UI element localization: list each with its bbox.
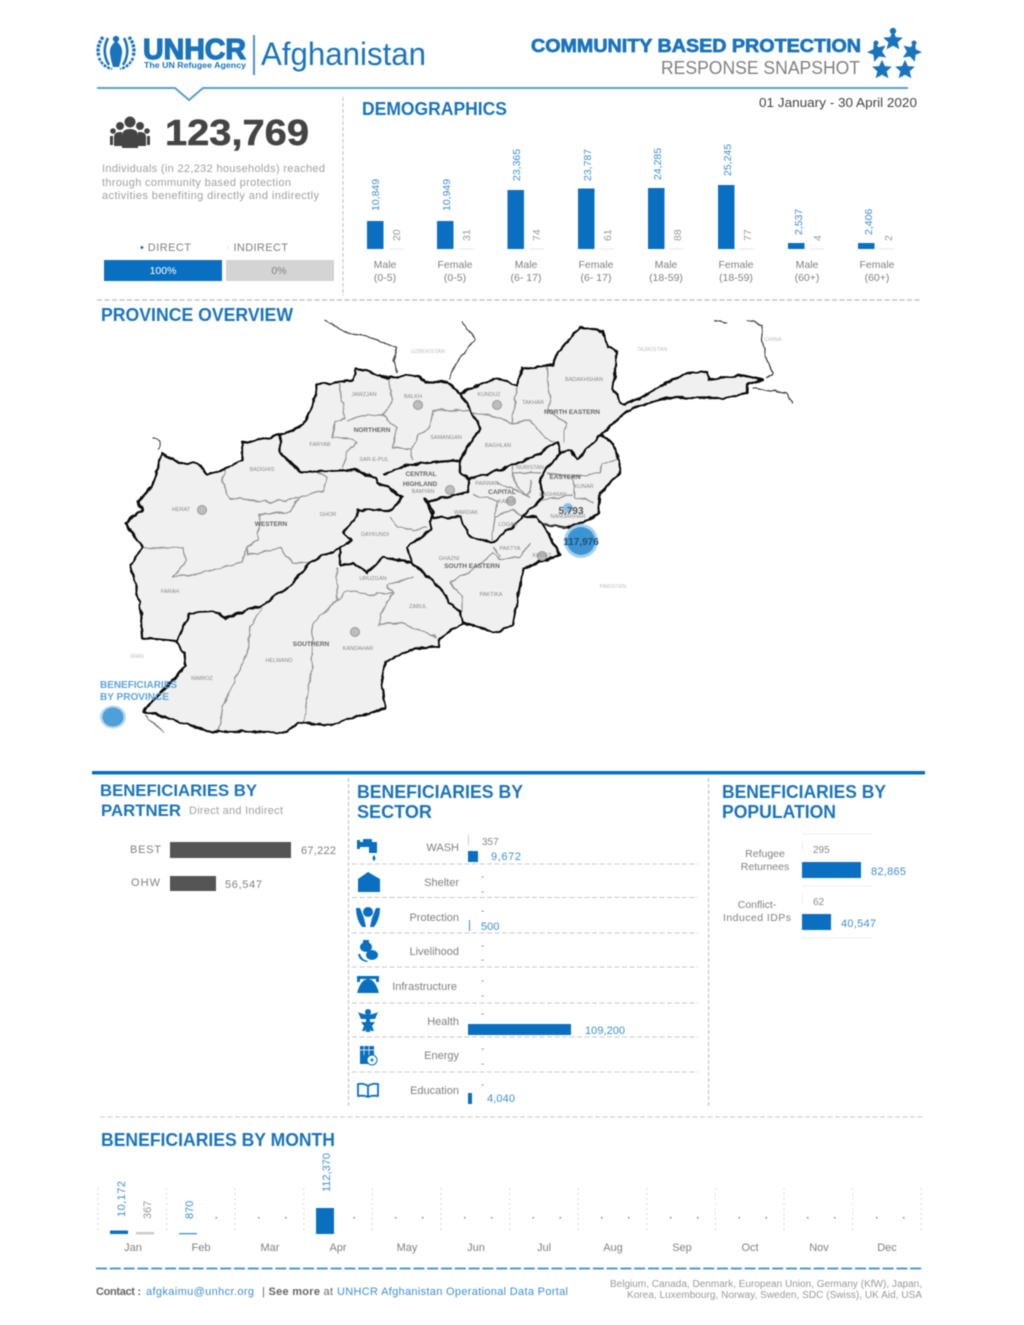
column chart: Aug [603, 1242, 623, 1254]
province labels: TAKHAR [522, 400, 544, 406]
panel: beneficiaries by partner [100, 781, 336, 891]
column chart: Jan [124, 1242, 142, 1254]
country fill [125, 327, 763, 732]
region labels: HIGHLAND [403, 481, 437, 488]
icon: road [357, 976, 379, 993]
total number: 123,769 [165, 112, 309, 153]
bar chart: 23,787 [582, 149, 594, 181]
footer: donors: Korea, Luxembourg, Norway, Sweden, SDC (Swiss), UK Aid, USA [627, 1290, 922, 1301]
province labels: BADGHIS [250, 467, 275, 473]
row: refugee returnees: 295 [813, 845, 830, 856]
column chart: Mar [261, 1242, 280, 1254]
bar chart: Female [578, 259, 614, 271]
panel: demographics [362, 98, 895, 284]
country labels: CHINA [764, 337, 782, 343]
map of Afghanistan [125, 320, 792, 733]
province labels: KUNDUZ [478, 392, 501, 398]
regional boundaries [125, 327, 763, 732]
logo tagline: The UN Refugee Agency [144, 60, 246, 70]
icon: protecting hands [356, 907, 380, 927]
province labels: FARYAB [309, 442, 331, 448]
icon: tap [357, 839, 377, 861]
row: conflict-induced IDPs: 40,547 [841, 918, 876, 930]
bar chart: 2,537 [793, 209, 805, 235]
region labels: WESTERN [255, 521, 288, 528]
province labels: PAKTYA [500, 546, 521, 552]
row: Energy: Energy [424, 1050, 459, 1062]
panel: beneficiaries by month [98, 1129, 921, 1254]
bar chart: 74 [531, 229, 543, 241]
region labels: NORTHERN [354, 427, 391, 434]
province labels [161, 377, 603, 682]
bar chart: Male [515, 259, 538, 271]
panel: beneficiaries by population [722, 781, 906, 938]
bar chart: (0-5) [374, 272, 396, 284]
report title [531, 35, 861, 78]
row: Livelihood [358, 940, 484, 966]
row: Education: - [481, 1080, 484, 1091]
row: Education: 4,040 [487, 1093, 515, 1105]
row: refugee returnees [741, 842, 906, 878]
footer: contact: afgkaimu@unhcr.org [146, 1286, 254, 1298]
description: through community based protection [102, 177, 291, 189]
panel: beneficiaries by sector: SECTOR [357, 801, 432, 822]
bar chart [367, 144, 895, 284]
region labels: CAPITAL [488, 489, 516, 496]
row: Infrastructure: - [481, 991, 484, 1002]
country title: Afghanistan [261, 36, 426, 72]
map legend: BY PROVINCE [100, 692, 169, 703]
bar chart: Female [718, 259, 754, 271]
report title: COMMUNITY BASED PROTECTION [531, 35, 861, 56]
bar chart: 24,285 [652, 148, 664, 180]
column chart: 10,172 [116, 1181, 128, 1217]
footer: contact [96, 1286, 568, 1298]
bubble: Khost [563, 524, 599, 558]
row: Shelter: - [481, 872, 484, 883]
province labels: ZABUL [409, 604, 427, 610]
bar chart: Male [796, 259, 819, 271]
region labels: EASTERN [549, 474, 581, 481]
row: Protection: 500 [481, 921, 499, 933]
header: logo and country [98, 34, 426, 75]
row: Shelter: Shelter [424, 877, 459, 889]
report title: RESPONSE SNAPSHOT [661, 57, 860, 78]
row: WASH: 357 [482, 837, 499, 848]
province labels: GHAZNI [439, 556, 460, 562]
row: Livelihood: - [481, 955, 484, 966]
bar chart: (6- 17) [581, 272, 611, 284]
icon: people [110, 116, 150, 148]
office markers [198, 400, 546, 636]
bar chart: (60+) [865, 272, 889, 284]
row: Livelihood: - [481, 941, 484, 952]
direct / indirect bars: 100% [150, 265, 176, 277]
map legend [100, 680, 177, 728]
icon: UNHCR emblem [98, 36, 134, 69]
neighbouring borders [145, 320, 792, 733]
country labels: IRAN [130, 654, 144, 660]
map legend: BENEFICIARIES [100, 680, 177, 691]
bar chart: Male [374, 259, 397, 271]
icon: livelihood [358, 940, 378, 962]
country labels: UZBEKISTAN [411, 349, 445, 355]
row: Education [358, 1080, 515, 1105]
direct / indirect bars: · INDIRECT [226, 242, 288, 254]
row: Infrastructure [357, 976, 484, 1002]
province labels: BAGHLAN [485, 443, 511, 449]
bar chart: 10,849 [370, 179, 382, 211]
bar chart: 61 [602, 229, 614, 241]
row: Protection: - [481, 906, 484, 917]
province labels: FARAH [161, 589, 179, 595]
row: WASH: WASH [426, 842, 459, 854]
row: Health: 109,200 [585, 1025, 625, 1037]
row: refugee returnees: Refugee [745, 848, 785, 860]
province labels: KHOST [533, 553, 552, 559]
province labels: HERAT [172, 507, 191, 513]
country labels: PAKISTAN [600, 584, 626, 590]
bar chart: (18-59) [649, 272, 683, 284]
row: refugee returnees: Returnees [741, 861, 789, 873]
bubble: Nangarhar: 5,793 [558, 506, 584, 517]
bar chart: Male [655, 259, 678, 271]
direct / indirect bars [104, 242, 334, 281]
column chart: Dec [877, 1242, 897, 1254]
heading: BENEFICIARIES BY MONTH [101, 1129, 335, 1150]
panel: beneficiaries by population: POPULATION [722, 801, 836, 822]
province labels: PARWAN [475, 481, 499, 487]
row: conflict-induced IDPs [723, 894, 876, 930]
footer: donors: Belgium, Canada, Denmark, European Union, Germany (KfW), Japan, [610, 1279, 922, 1290]
province labels: BAMYAN [412, 489, 434, 495]
row: Livelihood: Livelihood [409, 946, 459, 958]
province labels: NANGARHAR [550, 514, 586, 520]
province labels: KABUL [498, 499, 516, 505]
row: WASH: 9,672 [491, 851, 521, 863]
column chart: Jun [467, 1242, 485, 1254]
bar chart: 88 [672, 229, 684, 241]
row: conflict-induced IDPs: Conflict- [738, 899, 777, 911]
bar: BEST [130, 842, 336, 858]
footer: donors [610, 1279, 922, 1301]
bar: BEST: BEST [130, 844, 161, 856]
column chart: May [397, 1242, 418, 1254]
row: Energy: - [481, 1044, 484, 1055]
row: Energy: - [481, 1059, 484, 1070]
footer: contact: | See more at [262, 1286, 333, 1298]
province labels: BADAKHSHAN [565, 377, 603, 383]
column chart: 870 [184, 1201, 196, 1219]
bar: OHW: OHW [131, 877, 161, 889]
province labels: SAR-E-PUL [359, 457, 389, 463]
province labels: GHOR [320, 512, 336, 518]
column chart: Oct [741, 1242, 759, 1254]
province labels: PAKTIKA [480, 592, 503, 598]
province boundaries [143, 367, 618, 732]
row: Shelter [358, 872, 484, 898]
bar chart: 31 [461, 229, 473, 241]
footer: contact: Contact : [96, 1286, 141, 1298]
province labels: LOGAR [498, 522, 518, 528]
province labels: NURISTAN [516, 465, 544, 471]
row: conflict-induced IDPs: 62 [813, 897, 825, 908]
bar: BEST: 67,222 [301, 845, 336, 857]
province labels: KANDAHAR [343, 646, 373, 652]
heading: BENEFICIARIES BY [357, 781, 524, 802]
country labels: TAJIKISTAN [637, 347, 667, 353]
row: Health: - [481, 1009, 484, 1020]
heading: DEMOGRAPHICS [362, 98, 507, 119]
bar: OHW: 56,547 [225, 879, 262, 891]
panel: beneficiaries by sector [352, 781, 698, 1105]
province labels: KUNAR [574, 484, 594, 490]
region labels: SOUTHERN [293, 641, 330, 648]
province labels: LAGHMAN [539, 492, 567, 498]
bar chart: Female [859, 259, 895, 271]
row: refugee returnees: 82,865 [871, 866, 906, 878]
province labels: NIMROZ [191, 676, 213, 682]
icon: community stars [865, 28, 924, 78]
row: Protection: Protection [409, 912, 459, 924]
bar chart: 2,406 [863, 209, 875, 235]
bar chart: Female [437, 259, 473, 271]
bar chart: (60+) [795, 272, 819, 284]
province labels: HELMAND [266, 658, 292, 664]
province labels: BALKH [404, 394, 422, 400]
column chart: Jul [537, 1242, 551, 1254]
footer: contact: UNHCR Afghanistan Operational Data Portal [337, 1286, 568, 1298]
bar chart: 77 [742, 229, 754, 241]
bar: OHW [131, 876, 262, 891]
row: Health: Health [427, 1016, 459, 1028]
row: Infrastructure: - [481, 976, 484, 987]
heading: PROVINCE OVERVIEW [101, 304, 294, 325]
country labels [130, 337, 782, 660]
direct / indirect bars: 0% [271, 265, 287, 277]
panel: headline total [102, 112, 334, 281]
column chart: 112,370 [321, 1153, 333, 1192]
row: Shelter: - [481, 887, 484, 898]
description: Individuals (in 22,232 households) reached [102, 163, 325, 175]
column chart [110, 1153, 904, 1254]
province labels: URUZGAN [359, 576, 387, 582]
bar chart: 23,365 [511, 149, 523, 181]
icon: book [358, 1084, 378, 1097]
row: Protection [356, 906, 499, 933]
bar chart: (6- 17) [511, 272, 541, 284]
column chart: Nov [809, 1242, 829, 1254]
region labels: NORTH EASTERN [544, 409, 600, 416]
bar chart: 2 [883, 235, 895, 241]
panel: province overview [100, 304, 792, 733]
direct / indirect bars: • DIRECT [140, 242, 191, 254]
bar chart: 10,949 [441, 179, 453, 211]
bar chart: 20 [391, 229, 403, 241]
panel: beneficiaries by partner: Direct and Indirect [189, 805, 283, 817]
province labels: DAYKUNDI [361, 532, 389, 538]
description: activities benefiting directly and indirectly [102, 190, 320, 202]
heading: BENEFICIARIES BY [722, 781, 887, 802]
column chart: Feb [192, 1242, 210, 1254]
bar chart: (0-5) [444, 272, 466, 284]
row: Education: Education [410, 1085, 459, 1097]
icon: energy panel [360, 1046, 377, 1065]
column chart: Sep [672, 1242, 692, 1254]
province labels: JAWZJAN [351, 392, 377, 398]
panel: beneficiaries by partner: PARTNER [101, 801, 181, 820]
region labels [255, 409, 600, 648]
icon: caduceus [358, 1009, 378, 1032]
bar chart: (18-59) [719, 272, 753, 284]
bubble: Khost: 117,976 [563, 537, 599, 548]
province labels: SAMANGAN [430, 435, 462, 441]
date range: 01 January - 30 April 2020 [759, 95, 917, 110]
row: Infrastructure: Infrastructure [392, 981, 457, 993]
row: Health [358, 1009, 625, 1037]
column chart: 367 [142, 1201, 154, 1219]
province labels: WARDAK [454, 510, 478, 516]
icon: house [358, 872, 380, 892]
bar chart: 4 [812, 235, 824, 241]
bar chart: 25,245 [722, 144, 734, 176]
row: Energy [360, 1044, 484, 1070]
row: WASH [357, 835, 521, 863]
heading: BENEFICIARIES BY [100, 781, 258, 800]
row: conflict-induced IDPs: Induced IDPs [723, 912, 791, 924]
logo wordmark: UNHCR [143, 34, 246, 66]
column chart: Apr [329, 1242, 347, 1254]
region labels: SOUTH EASTERN [444, 563, 500, 570]
description [102, 163, 325, 202]
region labels: CENTRAL [405, 471, 437, 478]
